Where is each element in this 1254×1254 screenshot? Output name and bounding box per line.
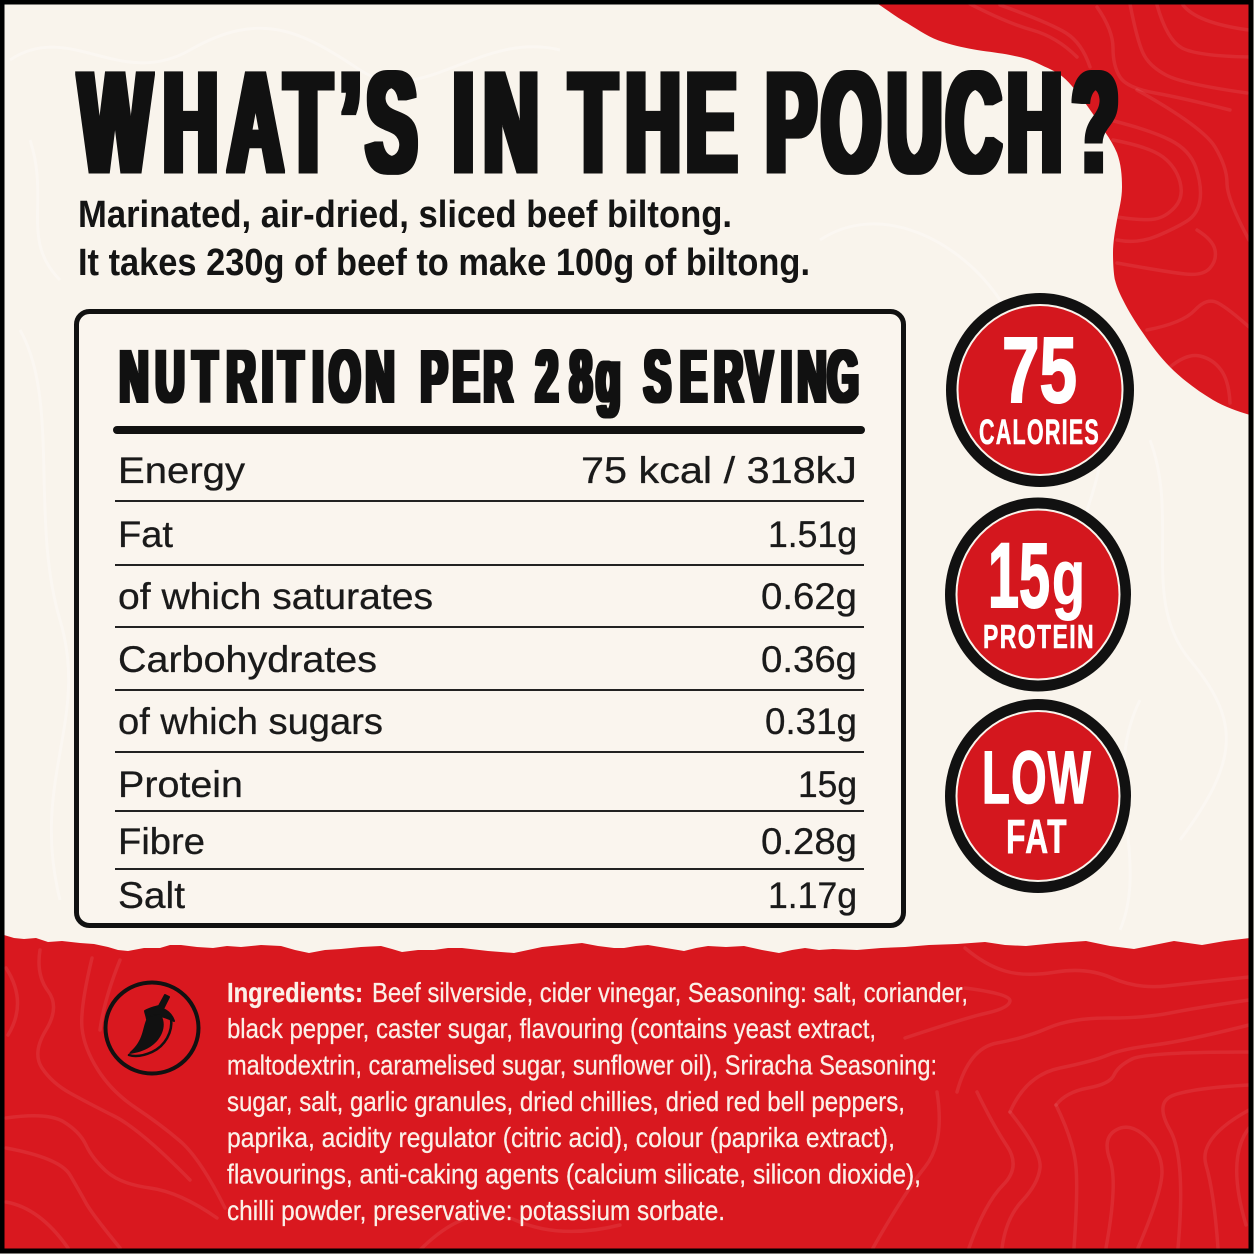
row: carbohydrates: [118, 639, 857, 680]
row: fat: Fat: [118, 514, 174, 555]
badge: 75 calories: CALORIES: [979, 413, 1100, 452]
row: energy: [118, 450, 857, 491]
row: sugars: [118, 701, 857, 742]
row: salt: 1.17g: [768, 875, 857, 916]
row: fibre: Fibre: [118, 821, 205, 862]
ingredients text: black pepper, caster sugar, flavouring (contains yeast extract,: [227, 1013, 876, 1044]
row: salt: [118, 875, 857, 916]
table heading: NUTRITION PER 28g SERVING: [120, 335, 859, 418]
row: protein: 15g: [798, 764, 857, 805]
row: saturates: of which saturates: [118, 576, 433, 617]
badge: 75 calories: [946, 293, 1134, 487]
ingredients text: chilli powder, preservative: potassium sorbate.: [227, 1195, 725, 1226]
title: WHAT’S IN THE POUCH?: [79, 43, 1119, 203]
row: protein: Protein: [118, 764, 243, 805]
row: carbohydrates: 0.36g: [761, 639, 857, 680]
bottom red band: [4, 935, 1250, 1250]
badge: low fat: LOW: [982, 736, 1092, 819]
badge: low fat: FAT: [1006, 811, 1068, 864]
badge: 75 calories: 75: [1002, 318, 1077, 422]
row: fat: [118, 514, 857, 555]
subtitle: Marinated, air-dried, sliced beef biltong.: [78, 194, 732, 236]
red corner blob: [878, 4, 1250, 415]
row: energy: 75 kcal / 318kJ: [581, 450, 857, 491]
row: fat: 1.51g: [768, 514, 857, 555]
badge: low fat: [945, 699, 1131, 893]
row: energy: Energy: [118, 450, 246, 491]
row: saturates: 0.62g: [761, 576, 857, 617]
row: sugars: 0.31g: [765, 701, 857, 742]
badge: 15g protein: [945, 498, 1131, 692]
row: saturates: [118, 576, 857, 617]
row: fibre: [118, 821, 857, 862]
icon: chilli: [106, 982, 198, 1074]
row: salt: Salt: [118, 875, 186, 916]
subtitle: It takes 230g of beef to make 100g of biltong.: [78, 242, 810, 284]
row: sugars: of which sugars: [118, 701, 383, 742]
ingredients text: Ingredients:: [227, 977, 363, 1008]
badge: 15g protein: PROTEIN: [983, 618, 1095, 655]
row: fibre: 0.28g: [761, 821, 857, 862]
ingredients text: paprika, acidity regulator (citric acid), colour (paprika extract),: [227, 1122, 895, 1153]
ingredients text: flavourings, anti-caking agents (calcium silicate, silicon dioxide),: [227, 1158, 921, 1190]
row: carbohydrates: Carbohydrates: [118, 639, 377, 680]
badge: 15g protein: g: [1052, 533, 1085, 621]
badge: 15g protein: 15: [988, 525, 1050, 627]
ingredients text: maltodextrin, caramelised sugar, sunflower oil), Sriracha Seasoning:: [227, 1050, 937, 1080]
panel: nutrition table: [76, 312, 904, 926]
row: protein: [118, 764, 857, 805]
ingredients text: sugar, salt, garlic granules, dried chillies, dried red bell peppers,: [227, 1086, 905, 1117]
subtitle: [78, 194, 810, 284]
ingredients text: Beef silverside, cider vinegar, Seasoning: salt, coriander,: [372, 977, 968, 1008]
ingredients text: [227, 977, 968, 1226]
